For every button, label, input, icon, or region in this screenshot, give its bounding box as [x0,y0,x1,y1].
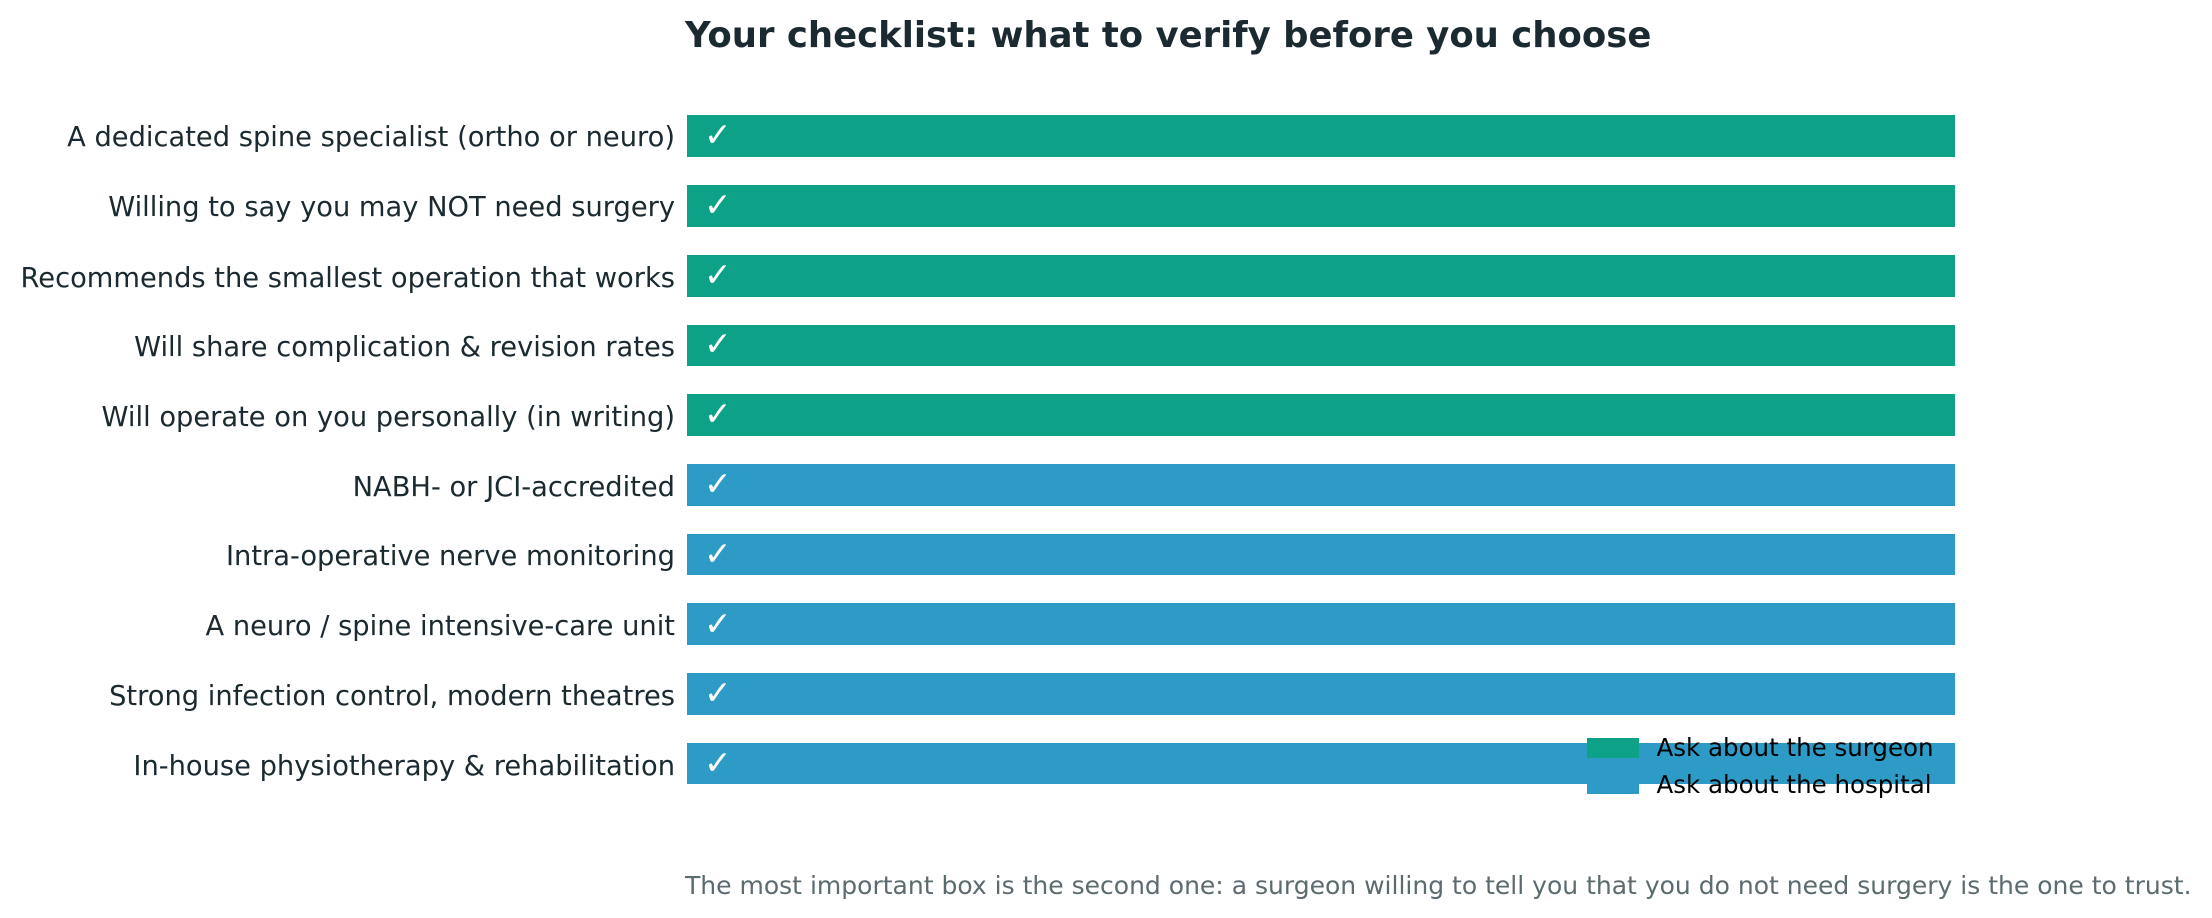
row: nerve monitoring: ✓ [704,534,732,573]
legend: hospital: Ask about the hospital [1656,770,1932,799]
row: physiotherapy: ✓ [704,743,732,782]
row: complication rates: Will share complication & revision rates [134,332,675,363]
row: accreditation: ✓ [704,464,732,503]
legend: surgeon: Ask about the surgeon [1656,733,1934,762]
row: operate personally: Will operate on you personally (in writing) [102,402,675,433]
row: physiotherapy: In-house physiotherapy & rehabilitation [133,751,675,782]
row: nerve monitoring: Intra-operative nerve monitoring [226,541,675,572]
row: smallest operation: Recommends the smallest operation that works [21,263,675,294]
legend [1587,733,1934,799]
row: complication rates: ✓ [704,324,732,363]
row: operate personally: ✓ [704,394,732,433]
row: dedicated spine specialist: A dedicated spine specialist (ortho or neuro) [67,122,675,153]
row: infection control [109,673,1955,715]
footnote: The most important box is the second one: a surgeon willing to tell you that you do not need surgery is the one to trust. [684,871,2192,900]
row: physiotherapy [133,743,1955,784]
row: dedicated spine specialist [67,115,1955,157]
row: operate personally [102,394,1955,436]
title: Your checklist: what to verify before you choose [684,15,1651,56]
row: willing to say no surgery [108,185,1955,227]
row: nerve monitoring [226,534,1955,575]
row: infection control: Strong infection control, modern theatres [109,681,675,712]
row: smallest operation [21,255,1955,297]
checklist bar chart [21,115,1955,784]
row: complication rates [134,324,1955,366]
row: accreditation [353,464,1955,506]
row: accreditation: NABH- or JCI-accredited [353,472,675,503]
row: willing to say no surgery: ✓ [704,185,732,224]
row: dedicated spine specialist: ✓ [704,115,732,154]
row: infection control: ✓ [704,673,732,712]
row: intensive-care unit: A neuro / spine intensive-care unit [205,611,675,642]
row: intensive-care unit [205,603,1955,645]
row: smallest operation: ✓ [704,255,732,294]
row: intensive-care unit: ✓ [704,604,732,643]
row: willing to say no surgery: Willing to say you may NOT need surgery [108,192,675,223]
